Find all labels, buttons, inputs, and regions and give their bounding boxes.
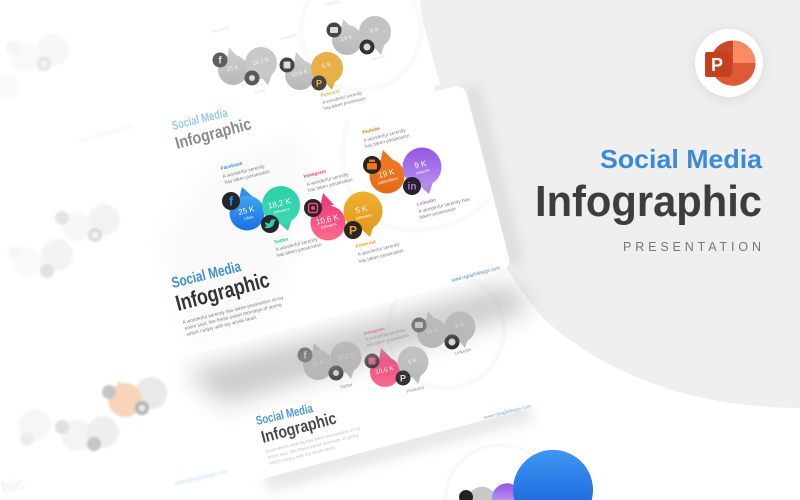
bottom bubbles [298, 312, 476, 387]
bottom right partial bubbles [445, 445, 593, 500]
bottom bubble values: 19 K [425, 328, 438, 336]
label: pinterest: has taken possession [358, 248, 405, 265]
bubble: pinterest: 5 K [354, 204, 369, 215]
faded bubbles middle left [8, 204, 120, 278]
bottom slide url: www.rrgraphdesign.com [483, 403, 531, 420]
bubble: facebook: 25 K [237, 204, 256, 217]
label: youtube [361, 125, 411, 150]
bubble: twitter [262, 186, 300, 231]
main slide card [119, 86, 509, 362]
main slide url: www.rrgraphdesign.com [451, 265, 501, 284]
bubble: linkedin: 9 K [413, 159, 428, 170]
label: facebook: Facebook [220, 161, 244, 172]
top bubbles [212, 16, 391, 90]
faded url upper left: www.rrgraphdesign.com [79, 124, 132, 144]
label: twitter [273, 236, 323, 259]
bubble: instagram: 10,6 K [315, 212, 340, 227]
top bubble values: 25 K [226, 65, 239, 73]
bubble: pinterest [344, 192, 382, 237]
bubble: linkedin [402, 148, 442, 194]
icon: pinterest: P [349, 224, 357, 238]
bubble: twitter: followers [273, 206, 290, 215]
top bubble values: 19 K [340, 35, 353, 43]
top slide title: Infographic [173, 114, 253, 153]
main slide pale panel [160, 130, 307, 345]
top bubbles: P [316, 78, 322, 88]
label: instagram [303, 169, 354, 194]
label: linkedin: LinkedIn [416, 197, 437, 208]
top labels: Instagram [279, 32, 298, 41]
top slide card [150, 0, 440, 160]
bottom labels: Pinterest [406, 385, 425, 394]
top labels [211, 0, 386, 95]
bottom slide card [210, 290, 530, 480]
label: pinterest: A wonderful serenity [357, 242, 401, 258]
grey bubble [467, 487, 497, 500]
icon: pinterest [344, 221, 362, 239]
main slide body text: A wonderful serenity has taken possession of my [182, 295, 285, 326]
bottom right arc [445, 445, 555, 500]
bottom labels [339, 347, 472, 394]
bubble: instagram [310, 193, 346, 240]
main slide title: Infographic [173, 267, 272, 316]
faded bubbles lower left [19, 377, 167, 451]
instagram note bottom [363, 326, 410, 348]
bottom slide body text: entire soul, like these sweet mornings of spring [267, 432, 359, 460]
main slide title: Social Media [170, 258, 243, 292]
icon: facebook: f [229, 194, 234, 208]
bottom bubble values: 18,2 K [337, 352, 355, 362]
bottom slide body text [265, 425, 361, 466]
label: youtube: has taken possession [364, 133, 411, 150]
label: facebook: has taken possession [224, 169, 271, 186]
bubble: youtube: subscribers [377, 176, 398, 185]
faded slide: middle left [8, 204, 120, 278]
bottom slide title: Infographic [259, 409, 338, 447]
main slide side shadow [462, 85, 525, 265]
faded slide: lower left [0, 377, 228, 498]
main slide body text [182, 295, 285, 338]
label: pinterest: Pinterest [355, 239, 377, 250]
bottom bubble values: 25 K [311, 360, 324, 368]
main slide shadow [185, 283, 532, 405]
top bubble values: 9 K [370, 27, 380, 35]
bottom bubbles: P [400, 374, 406, 384]
label: pinterest [355, 239, 405, 265]
purple bubble [492, 483, 522, 500]
icon: twitter [261, 215, 279, 233]
bottom slide body text: which I enjoy with my whole heart. [269, 445, 336, 466]
label: linkedin: A wonderful serenity has [418, 196, 471, 215]
bottom bubble values: 9 K [455, 322, 465, 330]
bottom bubble values: 10,6 K [375, 365, 395, 376]
slide: main [119, 85, 532, 405]
icon: facebook [222, 192, 240, 210]
label: twitter: A wonderful serenity [275, 237, 319, 253]
bottom bubble values: 5 K [408, 358, 418, 366]
bottom labels: LinkedIn [454, 347, 472, 356]
faded title fragment: hic [0, 475, 26, 498]
bubble: twitter: 18,2 K [267, 196, 292, 211]
label: instagram: has taken possession [307, 177, 354, 194]
icon: linkedin: in [408, 182, 416, 192]
bubble: instagram: followers [320, 221, 337, 230]
pinterest note top: has taken possession [323, 96, 367, 111]
bottom slide body text: A wonderful serenity has taken possession of my [265, 425, 361, 454]
top bubble values [226, 27, 380, 79]
bottom bubbles: f [303, 350, 307, 362]
slide: top [150, 0, 440, 160]
heading: social media: Social Media [600, 144, 763, 174]
label: twitter: Twitter [273, 236, 290, 246]
label: linkedin [416, 196, 471, 221]
label: instagram: Instagram [303, 169, 327, 180]
blue circle [513, 450, 593, 500]
bottom labels: Twitter [339, 382, 354, 390]
pinterest note top: Pinterest [320, 88, 340, 98]
subheading: presentation: PRESENTATION [623, 240, 761, 254]
top labels: Facebook [211, 25, 229, 34]
label: instagram: A wonderful serenity [306, 172, 350, 188]
bubble: youtube: 19 K [377, 167, 396, 180]
icon: powerpoint badge [695, 29, 763, 99]
badge circle [695, 29, 763, 97]
label: twitter: has taken possession [276, 242, 323, 259]
badge shadow [695, 31, 763, 99]
main slide body text: entire soul, like these sweet mornings of spring [184, 302, 283, 332]
bottom slide arc [388, 272, 504, 388]
top bubble values: 10,6 K [291, 69, 309, 79]
label: youtube: A wonderful serenity [363, 128, 407, 144]
pinterest note top [320, 88, 367, 111]
instagram note bottom: has taken possession [366, 333, 410, 348]
bubble: facebook [230, 187, 264, 230]
instagram note bottom: A wonderful serenity [365, 327, 406, 342]
main slide body text: which I enjoy with my whole heart. [186, 315, 258, 338]
powerpoint P tile: P [711, 55, 723, 75]
top slide title: Social Media [170, 105, 230, 133]
bubble: facebook: Likes [243, 214, 254, 221]
icon: instagram [304, 199, 322, 217]
instagram note bottom: Instagram [363, 326, 385, 336]
faded slide: upper left [0, 34, 132, 144]
slide: bottom [210, 272, 535, 492]
icon: linkedin [403, 177, 421, 195]
bottom slide title: Social Media [255, 401, 315, 428]
label: facebook [220, 161, 271, 186]
bubble: youtube [370, 150, 404, 194]
grey background shape [420, 0, 800, 408]
pinterest note top: A wonderful serenity [322, 90, 363, 105]
top bubble values: 5 K [322, 62, 332, 70]
main slide arcs [343, 120, 488, 230]
bottom bubble values [311, 322, 465, 376]
bottom slide shadow [260, 402, 535, 492]
top bubble values: 18,2 K [252, 57, 270, 67]
heading: infographic: Infographic [535, 177, 762, 226]
faded bubbles upper left [0, 34, 69, 99]
faded url lower left: www.rrgraphdesign.com [174, 469, 228, 487]
icon: youtube [363, 156, 381, 174]
top bubbles: f [218, 56, 222, 66]
top slide arc [301, 0, 421, 90]
top labels: Twitter [254, 87, 267, 95]
bubble: linkedin: network [415, 167, 430, 176]
top labels: LinkedIn [370, 53, 386, 62]
dark icon [459, 490, 473, 500]
label: youtube: Youtube [361, 125, 381, 136]
label: facebook: A wonderful serenity [222, 164, 266, 180]
bubble: pinterest: followers [355, 212, 372, 221]
label: linkedin: taken possession [419, 206, 457, 221]
powerpoint pie [710, 40, 756, 86]
